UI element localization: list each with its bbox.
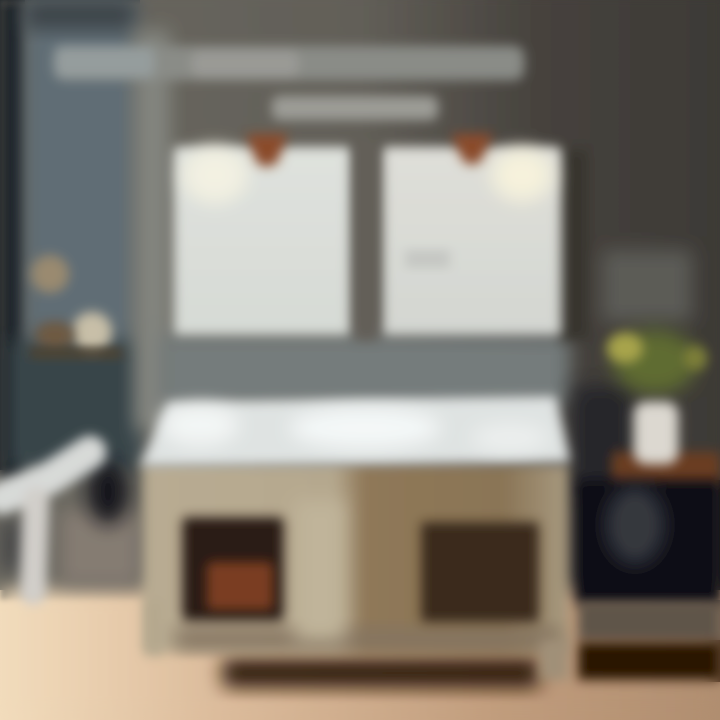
right cubby bbox=[421, 522, 539, 622]
lower cabinet rail bbox=[175, 628, 560, 650]
dark blob beside vanity bbox=[88, 460, 128, 524]
vanity cabinet bbox=[143, 465, 568, 680]
floor shadow under vanity bbox=[222, 658, 540, 688]
center door panel bbox=[295, 500, 345, 640]
right cabinet leg bbox=[540, 640, 568, 680]
right floor band bbox=[578, 602, 720, 640]
wall shelf with decor bbox=[30, 255, 122, 359]
side table bbox=[612, 452, 720, 488]
white chair bbox=[2, 452, 90, 592]
terracotta basket bbox=[207, 562, 273, 610]
dark armchair bbox=[575, 480, 720, 605]
right copper lamp bbox=[451, 134, 493, 165]
right mirror bbox=[383, 147, 561, 335]
wall sign on right bbox=[602, 250, 692, 322]
dark wall area behind side table bbox=[572, 385, 632, 495]
marble countertop bbox=[140, 396, 570, 466]
left cabinet leg bbox=[145, 600, 163, 655]
title (illegible, blurred in the reference) bbox=[54, 46, 524, 120]
left cubby bbox=[182, 517, 284, 621]
floor bbox=[0, 510, 720, 720]
plant bbox=[607, 330, 707, 394]
vase bbox=[634, 402, 678, 464]
left mirror bbox=[174, 147, 350, 335]
left copper lamp bbox=[246, 134, 288, 167]
floor shadow on right bbox=[578, 642, 720, 680]
mirror divider bbox=[355, 140, 377, 340]
